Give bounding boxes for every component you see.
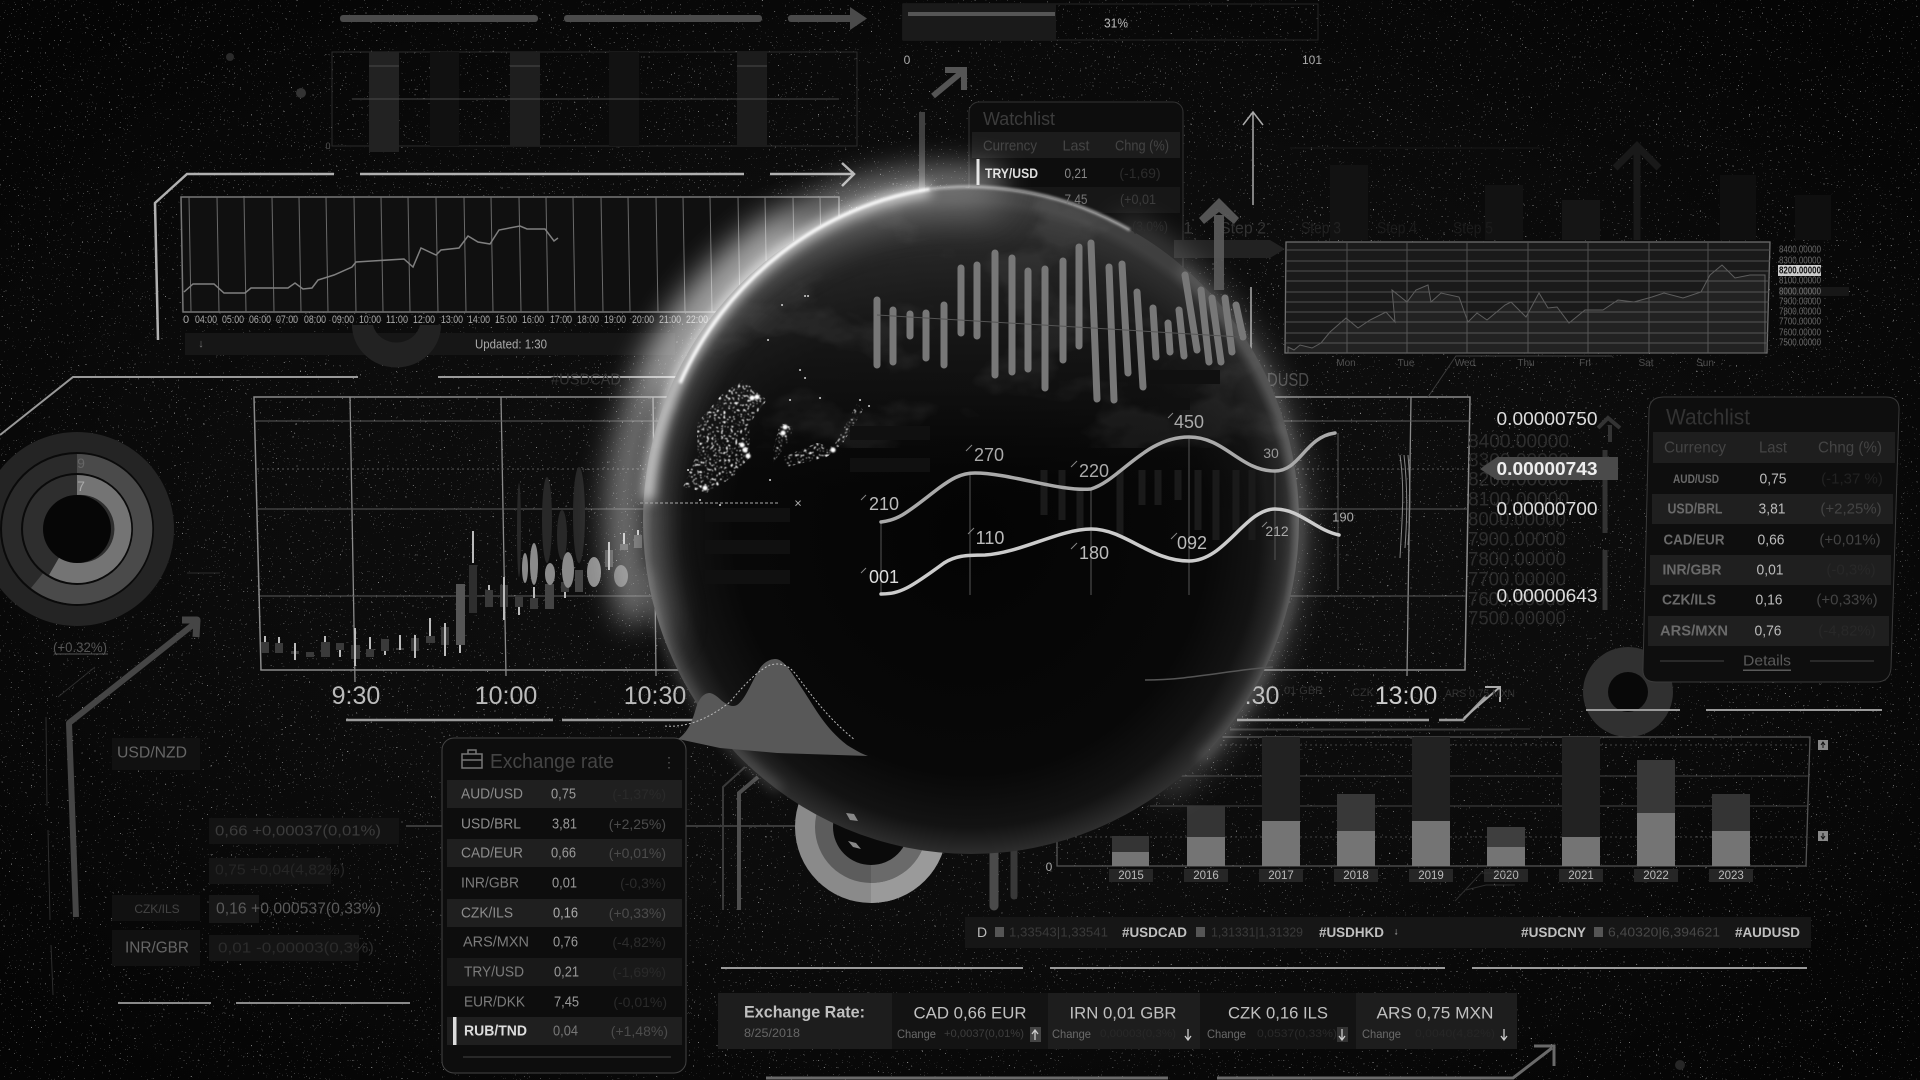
faded axis values: 7900.00000 — [1468, 530, 1566, 550]
panel: right watchlist: (+0,01%) — [1819, 532, 1881, 548]
panel: right watchlist: Chng (%) — [1818, 440, 1882, 456]
hourly line chart: 10:00 — [359, 314, 381, 326]
right weekly line chart: Fri — [1579, 358, 1591, 369]
panel: right watchlist: Watchlist — [1666, 404, 1750, 430]
right weekly line chart: 7500.00000 — [1779, 338, 1821, 348]
exchange rate rows: RUB/TND — [464, 1022, 527, 1040]
dark stacked bars — [1112, 737, 1750, 866]
ticker bar: #USDHKD — [1319, 924, 1384, 940]
updated status bar — [185, 325, 675, 367]
right weekly line chart — [1267, 242, 1849, 397]
wide atmosphere glow — [624, 184, 1000, 620]
exchange rate bar: Change — [1207, 1027, 1246, 1041]
left faded rate rows — [112, 738, 399, 966]
left faded rate rows: INR/GBR — [125, 940, 189, 956]
faded axis values: 8100.00000 — [1468, 490, 1569, 510]
details link: Details — [1743, 652, 1791, 670]
hourly line chart: 21:00 — [659, 314, 681, 326]
faded axis values: 7500.00000 — [1468, 608, 1566, 630]
year labels: 2023 — [1718, 870, 1744, 882]
light stacked bars — [1112, 813, 1750, 866]
ticker bar: 1,33543|1,33541 — [1009, 924, 1108, 940]
hourly line chart — [181, 197, 839, 326]
faint step bar chart: Step 2 — [1220, 218, 1266, 238]
panel: right watchlist: 0,66 — [1758, 532, 1784, 548]
short bars below globe — [990, 850, 998, 906]
small diagonal arrow top — [933, 70, 964, 96]
year labels: 2015 — [1118, 870, 1144, 882]
wave chart: 190 — [1332, 510, 1354, 524]
exchange rate rows: (-1,37%) — [612, 786, 666, 802]
time axis labels: :30 — [1245, 682, 1279, 710]
panel: top watchlist — [969, 102, 1183, 290]
panel: top watchlist: Chng (%) — [1115, 138, 1169, 154]
glints on globe — [846, 813, 861, 849]
ticker bar: #USDCAD — [1122, 924, 1187, 940]
year labels: 2020 — [1493, 870, 1519, 882]
wave chart: 220 — [1079, 461, 1109, 481]
updated status bar: ↓ — [198, 338, 204, 350]
left donut gauge: 9 — [77, 455, 85, 471]
scroll icons — [1818, 740, 1828, 841]
year labels: 2021 — [1568, 870, 1594, 882]
dim rows on globe — [705, 370, 1220, 584]
wave chart: 212 — [1265, 523, 1289, 539]
exchange rate bar: CZK 0,16 ILS — [1228, 1004, 1328, 1022]
time axis labels — [332, 682, 1437, 710]
exchange rate bar: Change — [897, 1027, 936, 1041]
exchange rate rows: CAD/EUR — [461, 844, 523, 862]
wave chart: 210 — [869, 494, 899, 514]
hourly line chart: 08:00 — [304, 314, 326, 326]
exchange rate rows: (+2,25%) — [609, 816, 666, 832]
faded axis values: 8400.00000 — [1468, 432, 1569, 452]
exchange rate header: ⋮ — [662, 754, 676, 770]
left faded rate rows: USD/NZD — [117, 744, 187, 762]
thin up arrow — [1243, 112, 1263, 352]
faded axis values: 8300.00000 — [1468, 450, 1569, 472]
wave chart — [861, 412, 1410, 595]
faded axis values: 8200.00000 — [1468, 470, 1569, 490]
donut behind globe — [795, 751, 947, 903]
right weekly line chart: 8300.00000 — [1779, 256, 1821, 266]
panel: right watchlist: 0,01 — [1756, 562, 1784, 578]
hourly line chart: 16:00 — [522, 314, 544, 326]
right weekly line chart: Wed — [1455, 358, 1475, 369]
right weekly line chart: 8000.00000 — [1779, 286, 1821, 298]
diagonal accents below bar chart — [1455, 873, 1622, 950]
exchange rate rows — [447, 780, 682, 1057]
left faded rate rows: 0,66 +0,00037(0,01%) — [215, 822, 381, 840]
year labels — [1109, 869, 1753, 882]
faint step bar chart: Step 4 — [1377, 218, 1417, 238]
panel: right watchlist — [1643, 397, 1899, 682]
globe — [622, 184, 1299, 854]
wave chart: 001 — [869, 567, 899, 587]
rules under right watchlist — [1586, 709, 1882, 711]
exchange rate bar: 0,00003(0,3%) — [1100, 1028, 1176, 1040]
panel: top watchlist: TRY/USD — [985, 165, 1038, 181]
wave chart: 270 — [974, 445, 1004, 465]
faint step bar chart: 1 — [1183, 218, 1193, 238]
panel: right watchlist: Currency — [1664, 440, 1726, 456]
faint up arrow right — [1615, 146, 1659, 240]
upper faint bar chart: 0 — [325, 141, 331, 151]
exchange rate bar: IRN 0,01 GBR — [1070, 1004, 1176, 1022]
hourly line chart: 11:00 — [386, 314, 408, 326]
dashed marker line: × — [794, 496, 802, 510]
top dashed arrow — [340, 7, 867, 30]
top watchlist residual rows: (+0,01 — [1120, 191, 1156, 207]
exchange rate rows: 0,16 — [553, 904, 578, 922]
ticker bar: 1,31331|1,31329 — [1211, 924, 1303, 940]
panel: right watchlist: (+2,25%) — [1820, 500, 1882, 518]
ticker bar — [965, 917, 1811, 948]
left donut gauge: 7 — [77, 478, 85, 494]
faint step bar chart: Step 3 — [1301, 218, 1341, 238]
wave chart: 110 — [976, 528, 1004, 548]
exchange rate rows: CZK/ILS — [461, 904, 513, 922]
wave chart: 30 — [1263, 445, 1279, 461]
right weekly line chart: Thu — [1517, 358, 1535, 369]
exchange rate rows: 0,66 — [551, 844, 576, 862]
hourly line chart: 19:00 — [604, 314, 626, 326]
ghost ticker labels: CZK — [1352, 687, 1375, 699]
exchange rate rows: EUR/DKK — [464, 994, 525, 1010]
exchange rate bar: ARS 0,75 MXN — [1376, 1004, 1494, 1022]
ticker bar: 6,40320|6,394621 — [1608, 924, 1720, 940]
price axis values: 0.00000750 — [1496, 409, 1598, 429]
year labels: 2022 — [1643, 870, 1669, 882]
hourly line chart: 05:00 — [222, 314, 244, 326]
exchange rate rows: (-4,82%) — [612, 934, 666, 950]
ticker icons — [995, 926, 1603, 938]
panel: right watchlist: INR/GBR — [1662, 562, 1722, 578]
wave chart: 450 — [1174, 412, 1204, 432]
exchange rate bar: +0,0037(0,01%) — [944, 1028, 1024, 1040]
ticker bar: #AUDUSD — [1735, 924, 1800, 940]
hourly line chart: 06:00 — [249, 314, 271, 326]
area chart peak — [665, 659, 868, 756]
ghost ticker labels: 01 GBR — [1284, 685, 1323, 697]
panel: right watchlist: 0,75 — [1760, 470, 1786, 488]
left faded rate rows: 0,16 +0,000537(0,33%) — [216, 900, 381, 918]
panel: right watchlist: USD/BRL — [1668, 500, 1722, 518]
hourly line chart: 0 — [183, 314, 189, 326]
exchange rate rows: 0,76 — [553, 934, 578, 950]
vertical bar by globe — [919, 112, 925, 202]
ghost ticker labels — [1284, 685, 1515, 700]
price axis values: 0.00000643 — [1496, 586, 1598, 606]
exchange rate bar: CAD 0,66 EUR — [914, 1004, 1026, 1022]
exchange rate rows: (-0,3%) — [620, 875, 666, 891]
exchange rate rows: 0,21 — [554, 964, 579, 980]
faded axis values: 7700.00000 — [1468, 570, 1566, 590]
hourly line chart: 22:00 — [686, 314, 708, 326]
panel: right watchlist: CAD/EUR — [1664, 532, 1725, 548]
panel: right watchlist: CZK/ILS — [1662, 592, 1716, 608]
candles — [261, 535, 642, 659]
candle shadows — [517, 467, 585, 577]
hourly line chart: 07:00 — [276, 314, 298, 326]
vertical bar series on globe — [877, 243, 1243, 400]
top progress bar: 0 — [904, 53, 911, 67]
panel: yearly bar chart: 0 — [1046, 860, 1053, 874]
ghost label usdcad: #USDCAD — [551, 372, 621, 388]
right weekly line chart: 7900.00000 — [1779, 296, 1821, 308]
main chart frame line — [0, 377, 680, 435]
exchange rate rows: AUD/USD — [461, 786, 523, 802]
ticker bar: D — [977, 924, 987, 940]
hourly line chart: 15:00 — [495, 314, 517, 326]
faint step bar chart — [1174, 148, 1831, 258]
right weekly line chart: Sun — [1696, 358, 1714, 369]
exchange rate rows: TRY/USD — [464, 964, 524, 980]
faded axis values — [1468, 432, 1569, 630]
large rising arrow — [69, 620, 197, 917]
panel: right watchlist: (-0,3%) — [1826, 562, 1876, 578]
top progress bar: 31% — [1104, 16, 1128, 30]
top watchlist residual rows: 7,45 — [1064, 191, 1088, 207]
top watchlist residual rows — [1064, 191, 1168, 234]
main candlestick chart — [254, 397, 1470, 682]
year labels: 2017 — [1268, 870, 1294, 882]
left rules — [118, 1002, 410, 1004]
panel: top watchlist: (-1,69) — [1119, 165, 1161, 181]
panel: right watchlist: (+0,33%) — [1816, 592, 1878, 608]
faded axis values: 8000.00000 — [1468, 510, 1566, 530]
exchange rate bar: 0,0537(0,33%) — [1257, 1028, 1337, 1040]
faint step bar chart: Step 5 — [1453, 218, 1493, 238]
panel: right watchlist: (-4,82%) — [1818, 622, 1876, 640]
bright rim arcs — [648, 190, 930, 500]
panel: top watchlist: Currency — [983, 138, 1037, 154]
year labels: 2016 — [1193, 870, 1219, 882]
left faded rate rows: 0,75 +0,04(4,82%) — [215, 862, 345, 878]
hourly line chart: 13:00 — [441, 314, 463, 326]
wave chart: 092 — [1177, 533, 1207, 553]
year labels: 2019 — [1418, 870, 1444, 882]
bottom rule with arrow — [766, 1046, 1554, 1078]
panel: top watchlist: 0,21 — [1064, 165, 1088, 181]
exchange rate rows: 0,75 — [551, 786, 576, 802]
panel: right watchlist: ARS/MXN — [1660, 622, 1728, 640]
exchange rate bar: 8/25/2018 — [744, 1026, 800, 1040]
price axis values — [1480, 409, 1618, 606]
right weekly line chart: Tue — [1398, 358, 1415, 369]
exchange rate rows: (-1,69%) — [612, 964, 666, 980]
faded right up arrow — [1598, 418, 1620, 610]
exchange rate header — [462, 750, 676, 773]
year labels: 2018 — [1343, 870, 1369, 882]
faded axis values: 7800.00000 — [1468, 550, 1566, 570]
exchange rate rows: ARS/MXN — [463, 934, 529, 950]
line chart frame arrow — [155, 163, 854, 340]
ticker bar: #USDCNY — [1521, 924, 1587, 940]
ghost ticker labels: ARS 0,75 MXN — [1445, 688, 1515, 700]
right weekly line chart: Mon — [1336, 358, 1356, 369]
exchange rate bar: 0,0040(4,82%) — [1415, 1028, 1495, 1040]
panel: right watchlist: 0,76 — [1754, 622, 1782, 640]
top progress bar — [903, 4, 1322, 67]
exchange rate bar: Exchange Rate: — [744, 1002, 865, 1022]
faint bars behind wave chart — [1044, 470, 1270, 540]
exchange rate rows: 0,04 — [553, 1022, 578, 1040]
hourly line chart: 04:00 — [195, 314, 217, 326]
hourly line chart: 17:00 — [550, 314, 572, 326]
exchange rate rows: (+1,48%) — [611, 1023, 668, 1039]
partial donut right — [1583, 647, 1673, 737]
hourly line chart: 20:00 — [632, 314, 654, 326]
updated status bar: Updated: 1:30 — [475, 336, 547, 352]
top watchlist residual rows: (3,0%) — [1132, 218, 1168, 234]
change arrows — [1030, 1027, 1507, 1042]
price axis values: 0.00000743 — [1496, 459, 1598, 479]
thick up arrow — [1199, 198, 1239, 290]
exchange rate rows: 3,81 — [552, 816, 577, 832]
time axis rules and arrow — [346, 696, 1486, 720]
hourly line chart: 18:00 — [577, 314, 599, 326]
exchange rate bar — [718, 993, 1517, 1049]
time axis labels: 13:00 — [1375, 682, 1437, 710]
panel: right watchlist: Last — [1759, 440, 1788, 456]
right weekly line chart: 8100.00000 — [1779, 276, 1821, 286]
exchange rate bar: Change — [1362, 1027, 1401, 1041]
left thin accents — [46, 573, 220, 995]
city lights — [683, 380, 863, 493]
right weekly line chart: DUSD — [1267, 370, 1309, 390]
top progress bar: 101 — [1302, 53, 1322, 67]
panel: top watchlist: Watchlist — [983, 109, 1055, 129]
exchange rate rows: USD/BRL — [461, 816, 521, 832]
exchange rate header: Exchange rate — [490, 751, 614, 773]
left faded rate rows: 0,01 -0,00003(0,3%) — [218, 940, 374, 956]
exchange rate rows: 7,45 — [554, 994, 579, 1010]
right weekly line chart: 7600.00000 — [1779, 328, 1821, 338]
time axis labels: 10:30 — [624, 682, 686, 710]
upper faint bar chart — [325, 52, 857, 152]
exchange rate rows: INR/GBR — [461, 874, 519, 892]
exchange rate rows: (+0,01%) — [609, 845, 666, 861]
exchange rate rows: (-0,01%) — [613, 994, 667, 1010]
ticker icons: ↓ — [1394, 926, 1398, 938]
left donut gauge — [0, 432, 174, 626]
right weekly line chart: 7700.00000 — [1779, 316, 1821, 328]
panel: right watchlist: AUD/USD — [1673, 472, 1719, 486]
right weekly line chart: Sat — [1638, 358, 1654, 369]
panel: yearly bar chart — [1046, 737, 1828, 882]
right weekly line chart: 8400.00000 — [1779, 244, 1821, 256]
hourly line chart: 09:00 — [332, 314, 354, 326]
panel: right watchlist: 3,81 — [1758, 500, 1786, 518]
right weekly line chart: 8200.00000 — [1779, 266, 1821, 276]
hourly line chart: 14:00 — [468, 314, 490, 326]
exchange rate rows: (+0,33%) — [609, 905, 666, 921]
left faded rate rows: CZK/ILS — [134, 902, 180, 916]
panel: exchange rate — [442, 738, 686, 1073]
time axis labels: 10:00 — [475, 682, 537, 710]
wave chart: 180 — [1079, 543, 1109, 563]
exchange rate rows: 0,01 — [552, 874, 577, 892]
faded axis values: 7600.00000 — [1468, 590, 1566, 610]
percent label: (+0.32%) — [53, 639, 107, 655]
panel: right watchlist: (-1,37 %) — [1821, 470, 1883, 488]
right weekly line chart: 7800.00000 — [1779, 306, 1821, 318]
panel: right watchlist: 0,16 — [1756, 592, 1782, 608]
price axis values: 0.00000700 — [1496, 499, 1598, 519]
rules above exchange bar — [721, 967, 1807, 969]
exchange rate bar: Change — [1052, 1027, 1091, 1041]
panel: top watchlist: Last — [1062, 138, 1090, 154]
time axis labels: 9:30 — [332, 682, 380, 710]
hourly line chart: 12:00 — [413, 314, 435, 326]
side connector lines — [406, 767, 800, 910]
